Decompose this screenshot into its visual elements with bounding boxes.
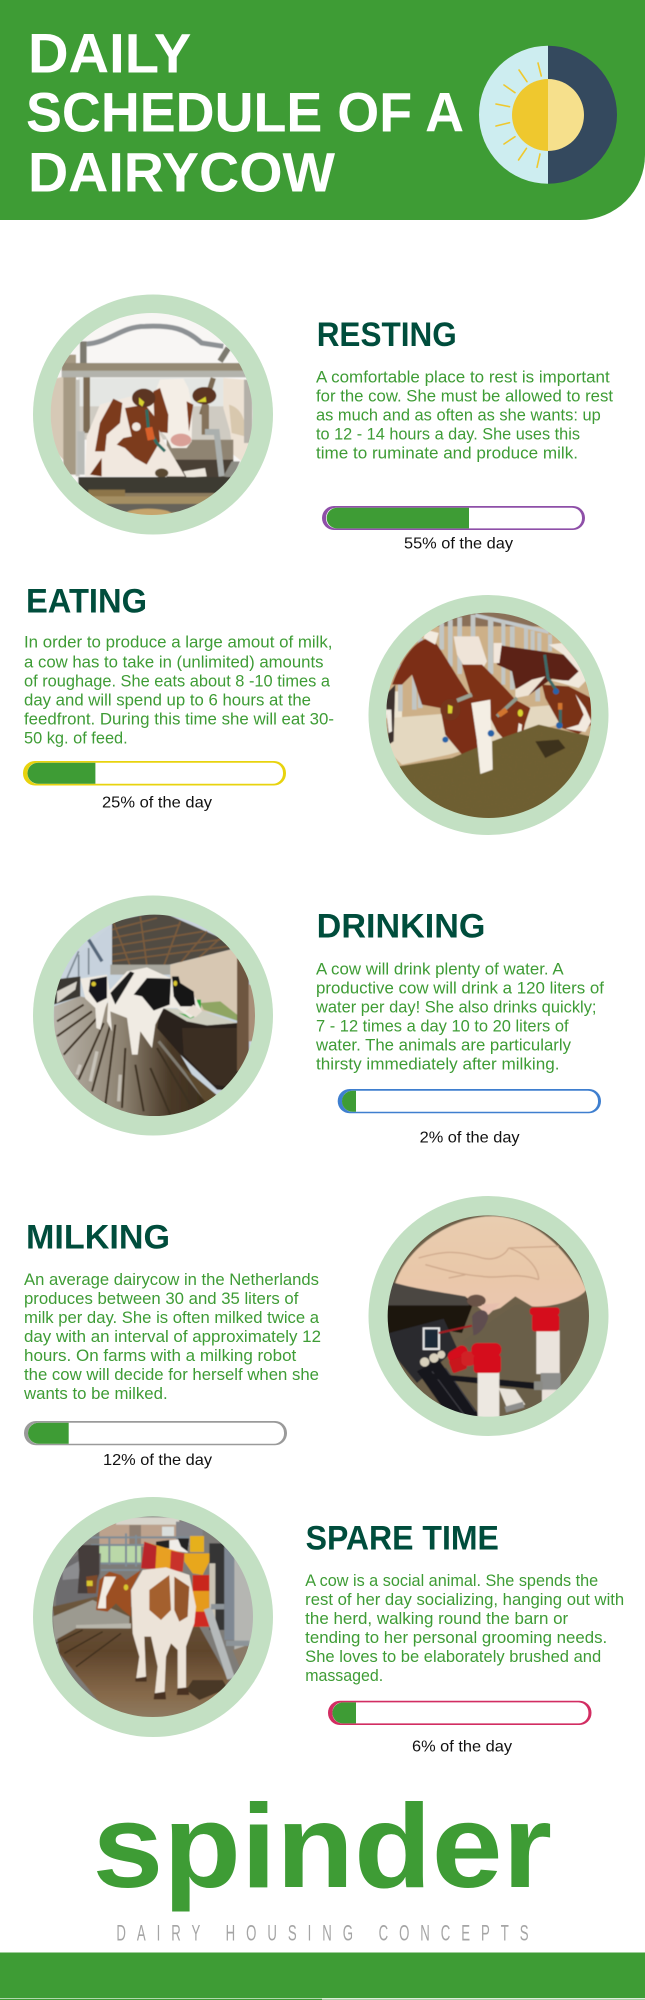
- photo: cow resting in stall: [50, 313, 253, 515]
- photo: cow drinking at trough: [54, 914, 255, 1116]
- text: drinking description: water. The animals are particularly: [315, 1036, 572, 1054]
- text: drinking description: thirsty immediately after milking.: [316, 1055, 560, 1073]
- photo: cow at grooming brush: [52, 1516, 253, 1717]
- panel: drinking: [33, 896, 604, 1147]
- photo ring: resting: [33, 294, 273, 534]
- text: milking description: [23, 1271, 321, 1403]
- heading: milking: MILKING: [26, 1218, 170, 1256]
- text: spare time description: massaged.: [305, 1667, 383, 1685]
- label: 6% of the day: 6% of the day: [412, 1739, 512, 1756]
- text: resting description: time to ruminate and produce milk.: [316, 444, 578, 462]
- text: drinking description: A cow will drink plenty of water. A: [316, 960, 564, 978]
- photo ring: drinking: [33, 896, 273, 1136]
- text: resting description: as much and as often as she wants: up: [316, 406, 601, 424]
- text: eating description: 50 kg. of feed.: [24, 730, 128, 748]
- text: spare time description: rest of her day socializing, hanging out with: [305, 1591, 624, 1609]
- heading: resting: RESTING: [317, 316, 457, 354]
- text: drinking description: [315, 960, 604, 1073]
- icon: day and night sun: [479, 46, 617, 184]
- title: SCHEDULE OF A: [26, 81, 464, 144]
- heading: drinking: DRINKING: [317, 908, 485, 946]
- photo: udder and milking robot: [388, 1215, 589, 1417]
- photo ring: eating: [368, 595, 608, 835]
- text: eating description: of roughage. She eats about 8 -10 times a: [24, 673, 331, 691]
- panel: eating: [23, 582, 608, 835]
- panel: milking: [23, 1196, 608, 1469]
- footer bar: [0, 1952, 645, 2000]
- heading: spare time: SPARE TIME: [306, 1519, 499, 1557]
- text: eating description: feedfront. During this time she will eat 30-: [24, 711, 334, 729]
- text: milking description: day with an interval of approximately 12: [24, 1328, 321, 1346]
- photo ring: spare time: [33, 1497, 273, 1737]
- text: milking description: milk per day. She is often milked twice a: [24, 1309, 320, 1327]
- text: resting description: to 12 - 14 hours a day. She uses this: [316, 425, 580, 443]
- header banner: [0, 0, 645, 220]
- text: drinking description: water per day! She also drinks quickly;: [315, 998, 596, 1016]
- text: spare time description: the herd, walking round the barn or: [305, 1610, 569, 1628]
- text: milking description: wants to be milked.: [23, 1385, 168, 1403]
- text: resting description: A comfortable place to rest is important: [316, 368, 610, 386]
- text: spare time description: A cow is a social animal. She spends the: [305, 1572, 598, 1590]
- label: 12% of the day: 12% of the day: [103, 1452, 212, 1469]
- progress bar: 6%: [328, 1701, 592, 1725]
- title: [26, 22, 464, 204]
- photo ring: milking: [368, 1196, 608, 1436]
- text: eating description: [24, 634, 334, 748]
- text: eating description: a cow has to take in (unlimited) amounts: [24, 654, 324, 672]
- text: drinking description: productive cow will drink a 120 liters of: [316, 979, 604, 997]
- panel: resting: [33, 294, 613, 552]
- text: spare time description: tending to her personal grooming needs.: [305, 1629, 607, 1647]
- progress bar: 12%: [24, 1421, 287, 1445]
- text: spare time description: [305, 1572, 624, 1685]
- progress bar: 55%: [322, 506, 585, 530]
- heading: eating: EATING: [26, 582, 147, 620]
- text: milking description: the cow will decide for herself when she: [24, 1366, 319, 1384]
- text: eating description: day and will spend up to 6 hours at the: [24, 692, 311, 710]
- text: eating description: In order to produce a large amout of milk,: [24, 634, 332, 652]
- text: spare time description: She loves to be elaborately brushed and: [305, 1648, 601, 1666]
- title: DAILY: [28, 22, 191, 85]
- text: drinking description: 7 - 12 times a day 10 to 20 liters of: [316, 1017, 569, 1035]
- text: milking description: An average dairycow in the Netherlands: [24, 1271, 319, 1289]
- title: DAIRYCOW: [28, 141, 335, 204]
- label: 2% of the day: 2% of the day: [420, 1130, 520, 1147]
- label: 25% of the day: 25% of the day: [102, 795, 212, 812]
- progress bar: 2%: [338, 1089, 601, 1113]
- panel: spare time: [33, 1497, 624, 1756]
- label: 55% of the day: 55% of the day: [404, 535, 513, 552]
- logo: spinder: spinder: [92, 1780, 552, 1913]
- text: resting description: for the cow. She must be allowed to rest: [316, 387, 613, 405]
- text: milking description: produces between 30 and 35 liters of: [24, 1290, 299, 1308]
- progress bar: 25%: [23, 761, 286, 786]
- text: resting description: [316, 368, 613, 462]
- text: milking description: hours. On farms with a milking robot: [24, 1347, 297, 1365]
- tagline: DAIRY HOUSING CONCEPTS: [116, 1921, 529, 1945]
- photo: cows eating at feedfront: [386, 612, 592, 818]
